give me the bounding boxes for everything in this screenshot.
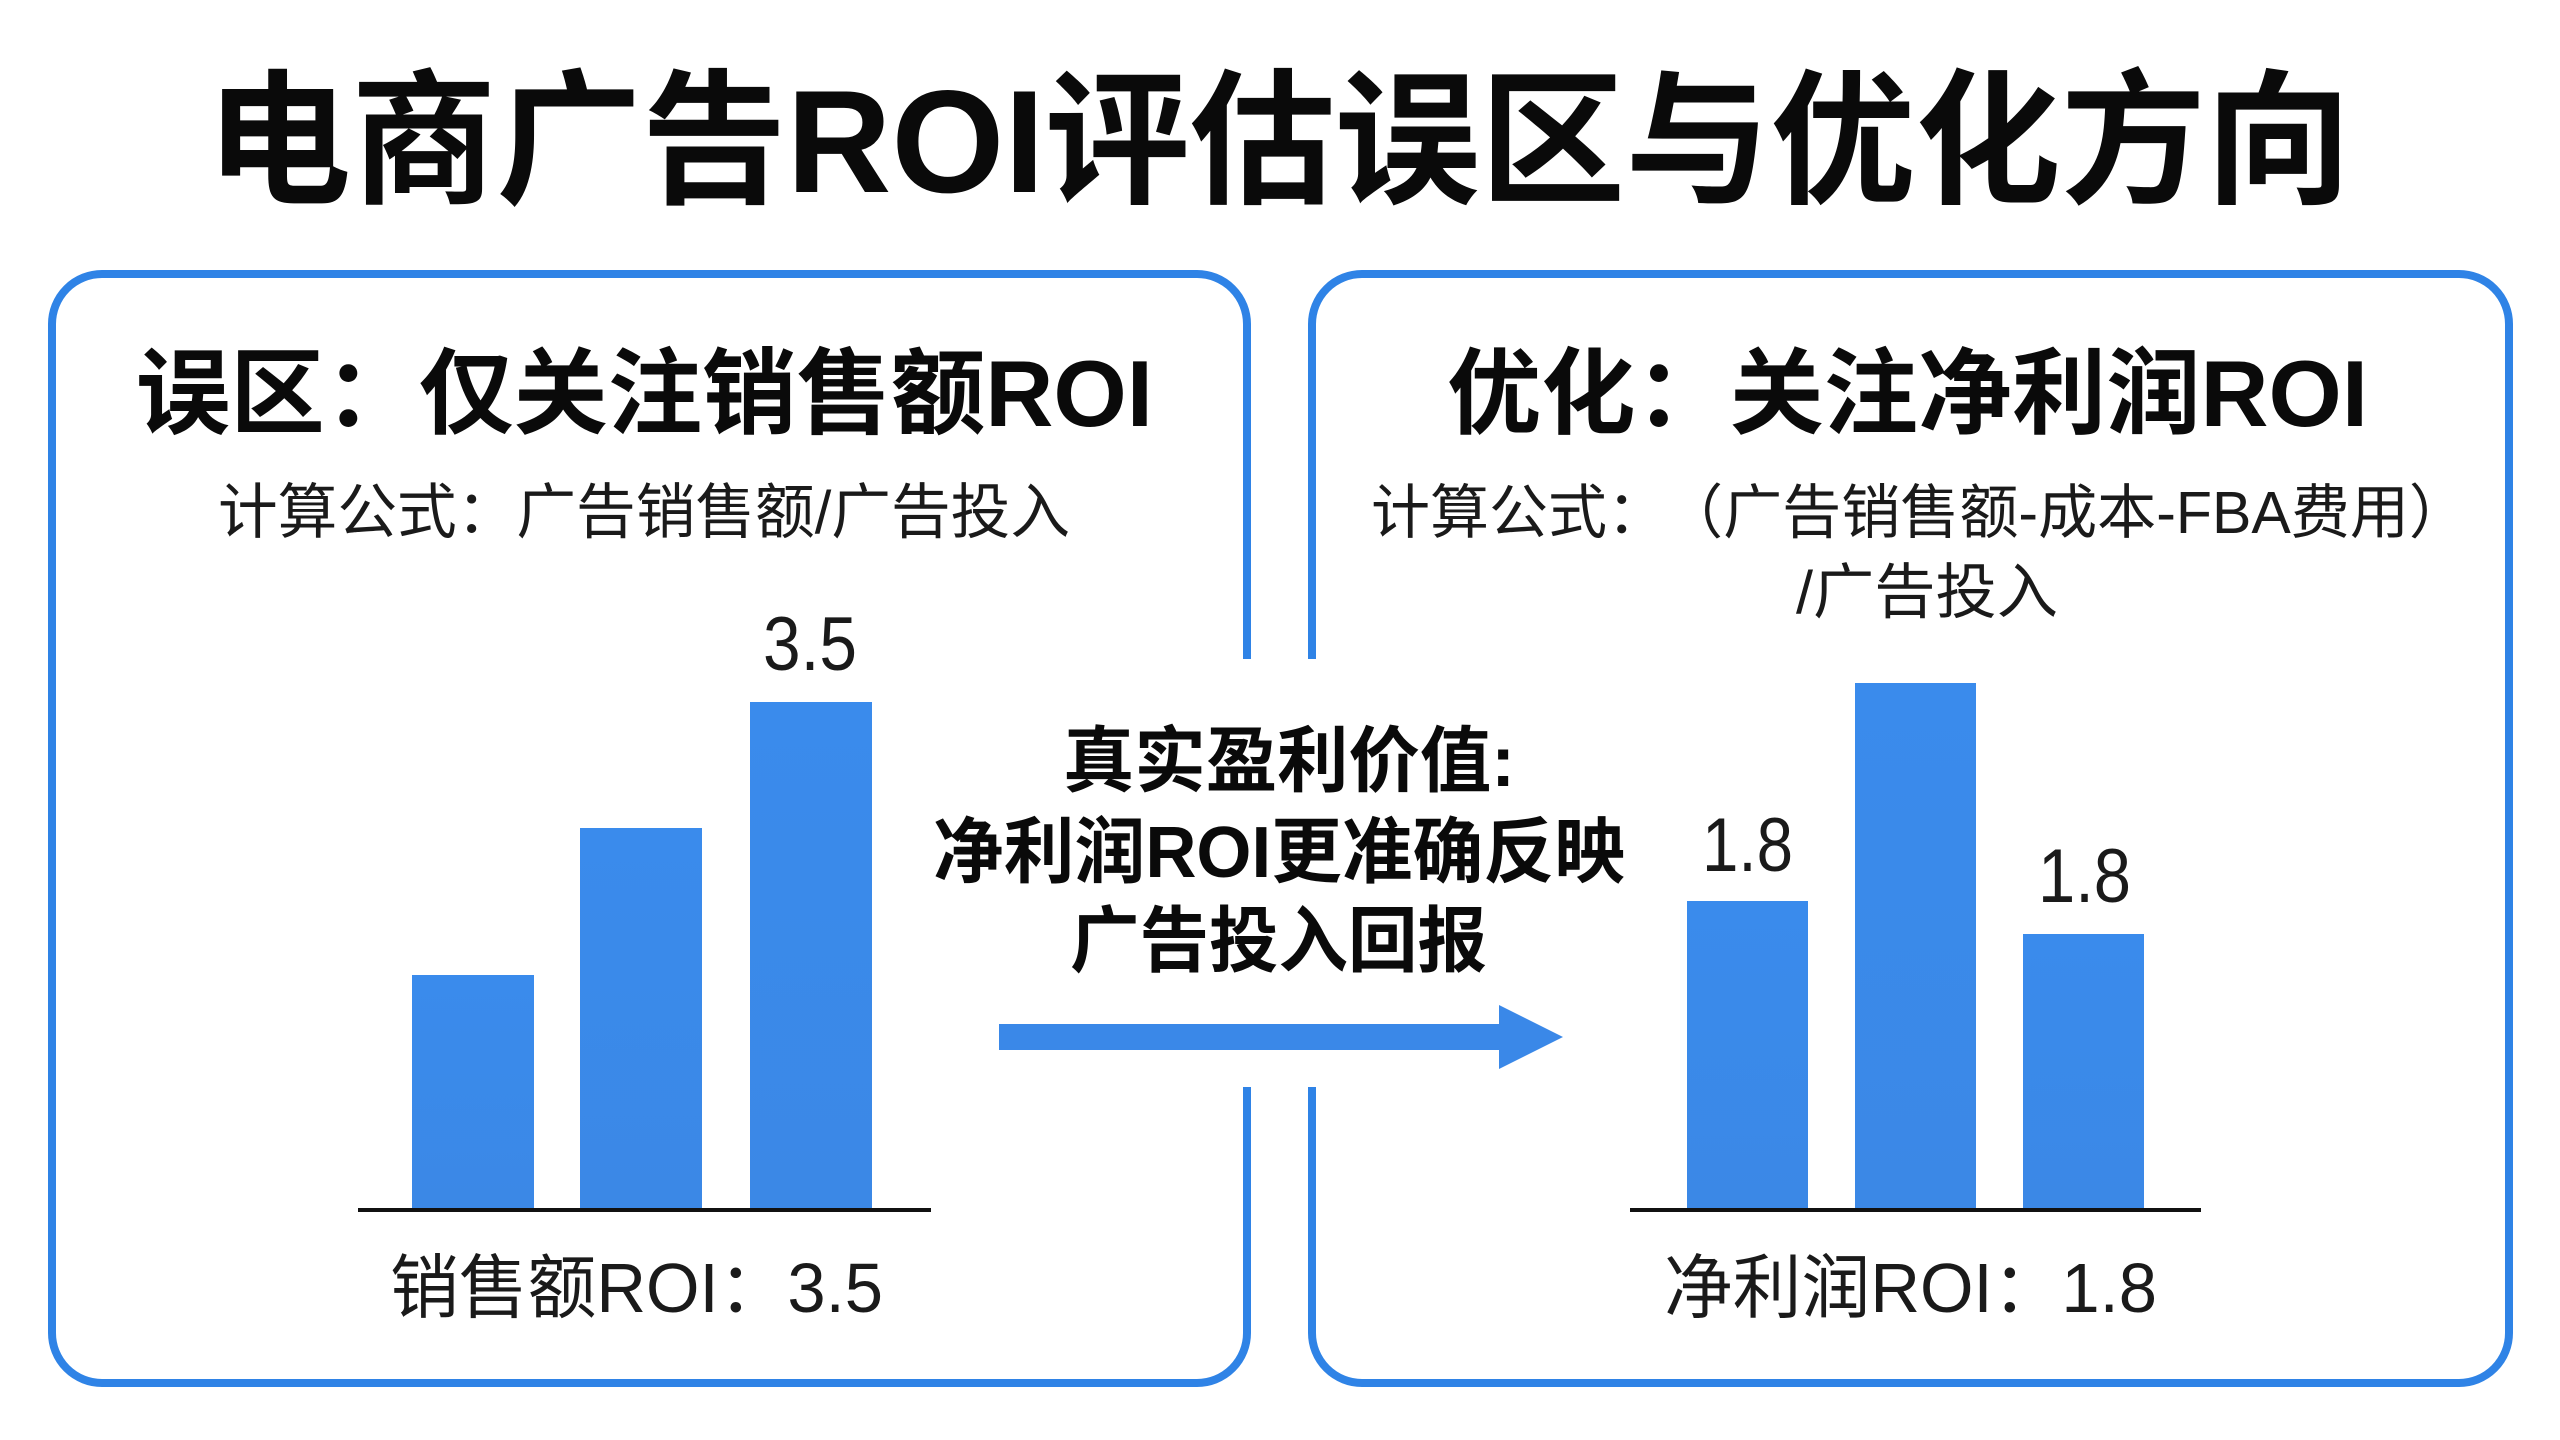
value label: 3.5: 3.5 xyxy=(763,602,857,687)
panel: optimization xyxy=(1312,274,2509,1383)
panel: misconception xyxy=(52,274,1247,1383)
value label: 1.8 third bar: 1.8 xyxy=(2038,834,2131,919)
value label: 1.8 first bar: 1.8 xyxy=(1702,803,1793,888)
bar chart: sales ROI xyxy=(358,602,931,1212)
callout: true profit value: 真实盈利价值: xyxy=(1063,722,1515,802)
arrow xyxy=(999,1005,1563,1069)
formula: net profit ROI: /广告投入 xyxy=(1796,559,2058,626)
heading: misconception: 误区：仅关注销售额ROI xyxy=(136,341,1153,446)
chart caption: sales ROI: 销售额ROI：3.5 xyxy=(390,1249,883,1327)
formula: sales ROI: 计算公式：广告销售额/广告投入 xyxy=(218,479,1070,546)
panel border: left xyxy=(52,274,1247,1383)
formula: net profit ROI xyxy=(1371,480,2468,626)
callout: true profit value: 净利润ROI更准确反映 xyxy=(933,813,1625,893)
callout: true profit value xyxy=(933,722,1625,982)
chart caption: net profit ROI: 净利润ROI：1.8 xyxy=(1664,1249,2157,1327)
formula: net profit ROI: （广告销售额-成本-FBA费用） xyxy=(1664,480,2468,546)
callout: true profit value: 广告投入回报 xyxy=(1070,902,1487,982)
bar chart: net profit ROI xyxy=(1630,683,2201,1212)
title: 电商广告ROI评估误区与优化方向 xyxy=(206,60,2351,223)
formula: net profit ROI: 计算公式： xyxy=(1371,480,1666,546)
panel border: right xyxy=(1312,274,2509,1383)
heading: optimization: 优化：关注净利润ROI xyxy=(1447,341,2368,446)
